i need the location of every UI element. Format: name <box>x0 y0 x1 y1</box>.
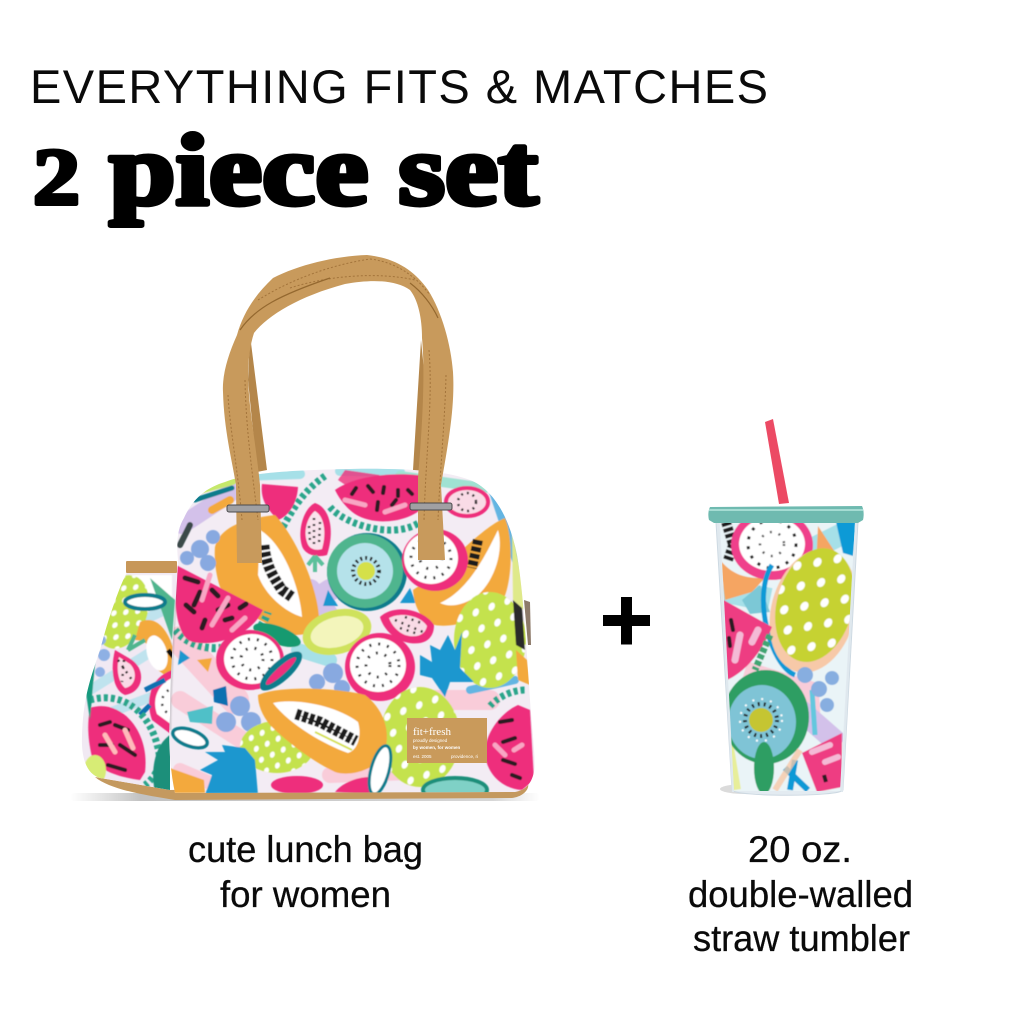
cup lime <box>756 538 870 683</box>
cup dragon fruit <box>730 523 814 580</box>
cup kiwi <box>723 670 809 764</box>
words piece set: piece set <box>109 114 538 227</box>
brand label patch: providence, ri <box>451 754 478 759</box>
papaya right <box>413 518 511 626</box>
cup leaf <box>754 742 774 794</box>
caption line 2: double-walled <box>688 874 913 915</box>
lime centre <box>302 608 372 656</box>
caption line 2: for women <box>220 874 391 915</box>
cup orange wedge <box>816 526 834 552</box>
dragon fruit centre <box>345 633 415 701</box>
cup blue arc <box>763 565 795 675</box>
zipper pull <box>524 600 531 645</box>
product: straw tumbler <box>708 419 870 795</box>
caption: tumbler <box>688 829 913 959</box>
papaya lower <box>258 689 387 774</box>
leaf green <box>252 622 302 648</box>
tan leather handles <box>223 255 453 563</box>
watermelon left <box>175 565 268 648</box>
kiwi <box>327 533 407 611</box>
rear handle <box>248 335 425 472</box>
dragon fruit top-right <box>446 488 488 516</box>
brand label patch: fit+fresh <box>413 726 451 738</box>
brand label patch: est. 2005 <box>413 754 432 759</box>
clear cup wall <box>716 522 858 795</box>
bottom fruit slivers <box>271 776 323 794</box>
side pocket <box>82 561 177 790</box>
numeral 2: 2 <box>33 134 80 222</box>
cup blueberries <box>797 667 839 712</box>
left seam shading <box>170 570 176 730</box>
cup aqua shape <box>742 585 770 614</box>
main bag body with fruit print <box>169 469 535 802</box>
accent triangles and marks <box>170 470 416 793</box>
pocket tan binding <box>126 561 177 573</box>
pink top-left fruit <box>262 484 298 520</box>
handle stitching <box>228 259 446 520</box>
leaf dark teal <box>259 651 303 692</box>
red straw <box>765 419 789 504</box>
watermelon top <box>335 474 425 521</box>
brand label patch <box>407 718 487 763</box>
right buckle <box>410 503 452 510</box>
strawberry <box>300 503 331 556</box>
caption line 1: 20 oz. <box>748 829 852 870</box>
right edge print <box>512 530 524 610</box>
teal lid <box>708 506 864 523</box>
cup glass edges <box>718 522 856 792</box>
lime lower-right <box>380 687 460 787</box>
tumbler print <box>720 523 855 791</box>
caption line 3: straw tumbler <box>693 918 910 959</box>
brand label patch: by women, for women <box>413 745 461 750</box>
dragon fruit centre left <box>216 630 284 690</box>
papaya upper-left <box>215 515 319 635</box>
lime lower-left <box>240 721 314 773</box>
layered strap crease <box>240 278 438 330</box>
pineapple leaves lower <box>200 745 258 795</box>
cup lower strokes <box>785 760 808 790</box>
bag ground shadow <box>70 793 540 801</box>
product: lunch bag <box>70 255 540 802</box>
left buckle <box>227 505 269 512</box>
cup papaya wedge <box>720 560 765 600</box>
top rims <box>283 476 325 527</box>
tumbler ground shadow <box>720 784 770 794</box>
pastel brush strokes <box>180 470 520 785</box>
small dragon pink <box>380 609 434 643</box>
pineapple leaves upper <box>420 632 474 697</box>
bag base <box>95 777 528 800</box>
watermelon right <box>490 690 525 706</box>
plus sign <box>603 597 650 644</box>
cup blue strip <box>836 522 857 556</box>
lime right <box>454 592 526 688</box>
dragon fruit right <box>402 529 468 591</box>
brand label patch: proudly designed <box>413 738 448 743</box>
caption line 1: cute lunch bag <box>188 829 423 870</box>
caption: lunch bag <box>188 829 423 915</box>
cup watermelon lower right <box>802 733 842 792</box>
cup watermelon left <box>720 598 772 680</box>
main heading <box>33 114 538 227</box>
eyebrow heading: EVERYTHING FITS & MATCHES <box>30 60 768 113</box>
blueberries <box>180 530 350 732</box>
cup seeds top left <box>726 522 733 560</box>
